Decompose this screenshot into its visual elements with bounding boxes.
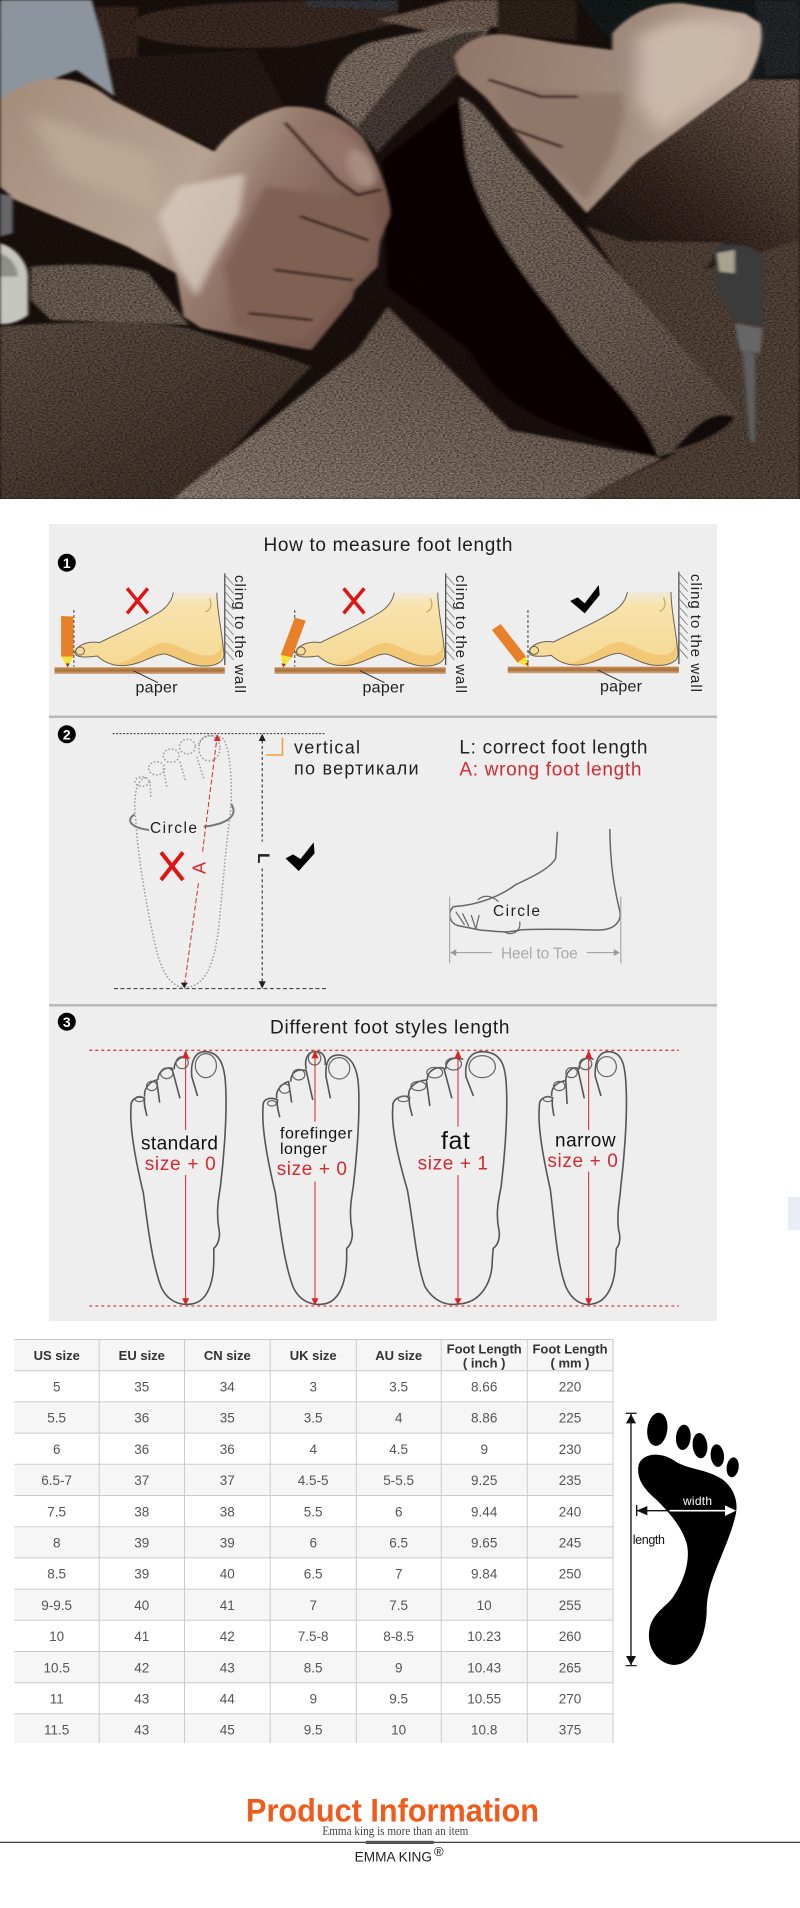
badge 1: 1 bbox=[63, 555, 71, 571]
row: 265 bbox=[559, 1660, 581, 1675]
section 1: wrong pencil position tilted bbox=[275, 573, 469, 696]
row: 8.86 bbox=[471, 1411, 497, 1426]
foot: fat: size + 1 bbox=[418, 1153, 488, 1174]
measuring guide panel bbox=[49, 524, 717, 1321]
legend: correct and wrong length bbox=[459, 737, 647, 780]
badge 3 bbox=[58, 1013, 76, 1031]
section 2: dotted foot top view with measurements: A bbox=[190, 862, 210, 874]
foot: standard: standard bbox=[141, 1133, 218, 1154]
row bbox=[53, 1380, 581, 1394]
row: 43 bbox=[134, 1723, 149, 1738]
row: 230 bbox=[559, 1442, 581, 1457]
foot: narrow: size + 0 bbox=[547, 1151, 618, 1172]
row: 6.5-7 bbox=[41, 1473, 72, 1488]
table header: Foot Length bbox=[532, 1341, 608, 1356]
vertical label: vertical bbox=[294, 737, 360, 757]
row: 42 bbox=[134, 1660, 149, 1675]
section 1: wrong pencil position tilted: paper bbox=[362, 680, 405, 696]
row: 45 bbox=[220, 1723, 235, 1738]
row: 270 bbox=[559, 1692, 581, 1706]
row: 44 bbox=[220, 1692, 235, 1706]
row: 11.5 bbox=[44, 1723, 69, 1738]
row: 8 bbox=[53, 1536, 60, 1550]
icon: check bbox=[570, 585, 600, 613]
row: 43 bbox=[134, 1692, 149, 1706]
row: 9 bbox=[309, 1692, 317, 1706]
footer rule bbox=[0, 1841, 800, 1844]
row: 260 bbox=[559, 1629, 581, 1644]
row: 7.5 bbox=[47, 1504, 66, 1519]
row: 8.5 bbox=[47, 1567, 66, 1582]
row: 38 bbox=[220, 1504, 235, 1519]
row bbox=[44, 1723, 581, 1738]
row: 5-5.5 bbox=[383, 1473, 414, 1488]
vertical label: по вертикали bbox=[294, 758, 418, 778]
badge 2 bbox=[58, 725, 76, 743]
row: 240 bbox=[559, 1504, 581, 1519]
section 1: correct pencil position bbox=[492, 572, 704, 696]
table header: ( mm ) bbox=[550, 1355, 590, 1370]
foot: forefinger longer bbox=[263, 1050, 359, 1305]
table grid bbox=[14, 1339, 613, 1743]
row: 9.65 bbox=[471, 1536, 497, 1550]
row: 9-9.5 bbox=[41, 1598, 72, 1613]
row: 3.5 bbox=[304, 1411, 323, 1426]
row: 10.5 bbox=[44, 1660, 70, 1675]
row bbox=[47, 1504, 581, 1519]
row: 10.55 bbox=[467, 1692, 501, 1706]
row: 9.25 bbox=[471, 1473, 497, 1488]
row: 39 bbox=[134, 1536, 149, 1550]
section 2: dotted foot top view with measurements: Circle bbox=[150, 820, 197, 837]
shirt sleeve bbox=[0, 0, 115, 100]
row: 37 bbox=[220, 1473, 235, 1488]
foot: standard: size + 0 bbox=[145, 1154, 216, 1175]
foot: fat: fat bbox=[441, 1127, 470, 1155]
legend: correct and wrong length: L: correct foot length bbox=[459, 737, 647, 758]
table header: ( inch ) bbox=[463, 1355, 506, 1370]
row: 5.5 bbox=[304, 1504, 323, 1519]
table row shading bbox=[14, 1339, 613, 1743]
row: 250 bbox=[559, 1567, 581, 1582]
row: 9.5 bbox=[389, 1692, 408, 1706]
size table bbox=[14, 1339, 613, 1743]
section 1: correct pencil position: paper bbox=[600, 678, 643, 696]
row: 8.66 bbox=[471, 1380, 497, 1394]
row: 7 bbox=[395, 1567, 402, 1582]
row: 10.8 bbox=[471, 1723, 497, 1738]
brand name: EMMA KING bbox=[355, 1849, 432, 1865]
row: 7 bbox=[309, 1598, 317, 1613]
row: 42 bbox=[220, 1629, 235, 1644]
vertical label bbox=[294, 737, 418, 778]
row: 6.5 bbox=[389, 1536, 408, 1550]
row: 39 bbox=[220, 1536, 235, 1550]
badge 2: 2 bbox=[63, 726, 71, 742]
legend: correct and wrong length: A: wrong foot length bbox=[459, 760, 641, 780]
row: 10.23 bbox=[467, 1629, 501, 1644]
pale blue edge tab bbox=[788, 1197, 800, 1230]
row: 10 bbox=[49, 1629, 64, 1644]
row: 11 bbox=[50, 1692, 64, 1706]
table header: UK size bbox=[290, 1348, 337, 1363]
row bbox=[47, 1411, 581, 1426]
badge 1 bbox=[58, 554, 76, 572]
brand name: ® bbox=[434, 1844, 444, 1859]
row: 40 bbox=[134, 1598, 149, 1613]
badge 3: 3 bbox=[63, 1014, 71, 1030]
row: 37 bbox=[134, 1473, 149, 1488]
row: 10 bbox=[477, 1598, 492, 1613]
row: 38 bbox=[134, 1504, 149, 1519]
foot: forefinger longer: forefinger bbox=[280, 1125, 353, 1142]
foot: fat bbox=[393, 1050, 507, 1305]
row: 5.5 bbox=[47, 1411, 66, 1426]
left arm and fist bbox=[0, 79, 391, 350]
hero photo: hands working leather bbox=[0, 0, 800, 500]
table header bbox=[34, 1341, 608, 1370]
row: 40 bbox=[220, 1567, 235, 1582]
row: 225 bbox=[559, 1411, 581, 1426]
row: 41 bbox=[220, 1598, 235, 1613]
row: 6 bbox=[53, 1442, 60, 1457]
row bbox=[44, 1660, 581, 1675]
tagline: Emma king is more than an item bbox=[322, 1824, 469, 1838]
heading: different foot styles: Different foot styles length bbox=[270, 1017, 510, 1038]
row: 9 bbox=[395, 1660, 402, 1675]
awl tool bbox=[714, 245, 763, 443]
side foot sketch heel to toe: Circle bbox=[493, 903, 540, 920]
foot: narrow bbox=[539, 1050, 626, 1305]
row: 7.5-8 bbox=[298, 1629, 329, 1644]
icon: check bbox=[286, 842, 315, 871]
table header: Foot Length bbox=[447, 1341, 522, 1356]
foot: forefinger longer: size + 0 bbox=[277, 1159, 347, 1180]
row: 7.5 bbox=[389, 1598, 408, 1613]
row: 4 bbox=[395, 1411, 403, 1426]
row: 235 bbox=[559, 1473, 581, 1488]
row: 36 bbox=[134, 1442, 149, 1457]
row: 41 bbox=[134, 1629, 149, 1644]
heading: product information: Product Information bbox=[246, 1793, 539, 1829]
side foot sketch heel to toe: Heel to Toe bbox=[501, 945, 578, 962]
section 1: wrong pencil position straight: paper bbox=[136, 680, 178, 696]
section 1: wrong pencil position straight bbox=[55, 573, 248, 696]
row: 10 bbox=[391, 1723, 406, 1738]
table header: US size bbox=[34, 1348, 80, 1363]
row: 8-8.5 bbox=[383, 1629, 414, 1644]
row: 36 bbox=[134, 1411, 149, 1426]
footprint diagram with width and length: width bbox=[682, 1494, 712, 1508]
footprint diagram with width and length bbox=[626, 1411, 740, 1666]
row: 375 bbox=[559, 1723, 581, 1738]
leather grain texture bbox=[0, 0, 800, 500]
row bbox=[53, 1536, 581, 1550]
foot: narrow: narrow bbox=[555, 1131, 616, 1152]
heading: how to measure: How to measure foot length bbox=[264, 535, 512, 556]
row: 5 bbox=[53, 1380, 60, 1394]
row: 4.5 bbox=[389, 1442, 408, 1457]
row: 3.5 bbox=[389, 1380, 408, 1394]
section 1: correct pencil position: cling to the wall bbox=[687, 574, 704, 692]
table header: EU size bbox=[119, 1348, 165, 1363]
row: 39 bbox=[134, 1567, 149, 1582]
row: 9.5 bbox=[304, 1723, 323, 1738]
row: 43 bbox=[220, 1660, 235, 1675]
row: 9.84 bbox=[471, 1567, 498, 1582]
row: 9.44 bbox=[471, 1504, 498, 1519]
brand name bbox=[355, 1844, 444, 1865]
tin can bbox=[0, 243, 28, 324]
row: 6 bbox=[395, 1504, 402, 1519]
row: 34 bbox=[220, 1380, 235, 1394]
row: 8.5 bbox=[304, 1660, 323, 1675]
section 2: dotted foot top view with measurements: L bbox=[254, 853, 273, 863]
row: 10.43 bbox=[467, 1660, 501, 1675]
row: 3 bbox=[309, 1380, 317, 1394]
row bbox=[50, 1692, 581, 1706]
row: 220 bbox=[559, 1380, 581, 1394]
row bbox=[53, 1442, 581, 1457]
section 1: wrong pencil position tilted: cling to the wall bbox=[452, 575, 469, 693]
row: 245 bbox=[559, 1536, 581, 1550]
row: 9 bbox=[480, 1442, 488, 1457]
row bbox=[49, 1629, 581, 1644]
right arm and fist bbox=[454, 3, 762, 213]
footprint diagram with width and length: length bbox=[633, 1533, 665, 1547]
row bbox=[41, 1598, 581, 1613]
row: 36 bbox=[220, 1442, 235, 1457]
row: 255 bbox=[559, 1598, 581, 1613]
row: 4 bbox=[309, 1442, 317, 1457]
row: 35 bbox=[134, 1380, 149, 1394]
row: 35 bbox=[220, 1411, 235, 1426]
row bbox=[41, 1473, 581, 1488]
foot: forefinger longer: longer bbox=[280, 1141, 328, 1158]
section 1: wrong pencil position straight: cling to the wall bbox=[231, 575, 248, 693]
red dotted length guides bbox=[89, 1050, 679, 1306]
row bbox=[47, 1567, 581, 1582]
foot: standard bbox=[131, 1050, 226, 1305]
row: 4.5-5 bbox=[298, 1473, 329, 1488]
row: 6 bbox=[309, 1536, 317, 1550]
table header: CN size bbox=[204, 1348, 251, 1363]
side foot sketch heel to toe bbox=[450, 829, 621, 963]
section 2: dotted foot top view with measurements bbox=[113, 734, 327, 989]
table header: AU size bbox=[375, 1348, 422, 1363]
row: 6.5 bbox=[304, 1567, 323, 1582]
